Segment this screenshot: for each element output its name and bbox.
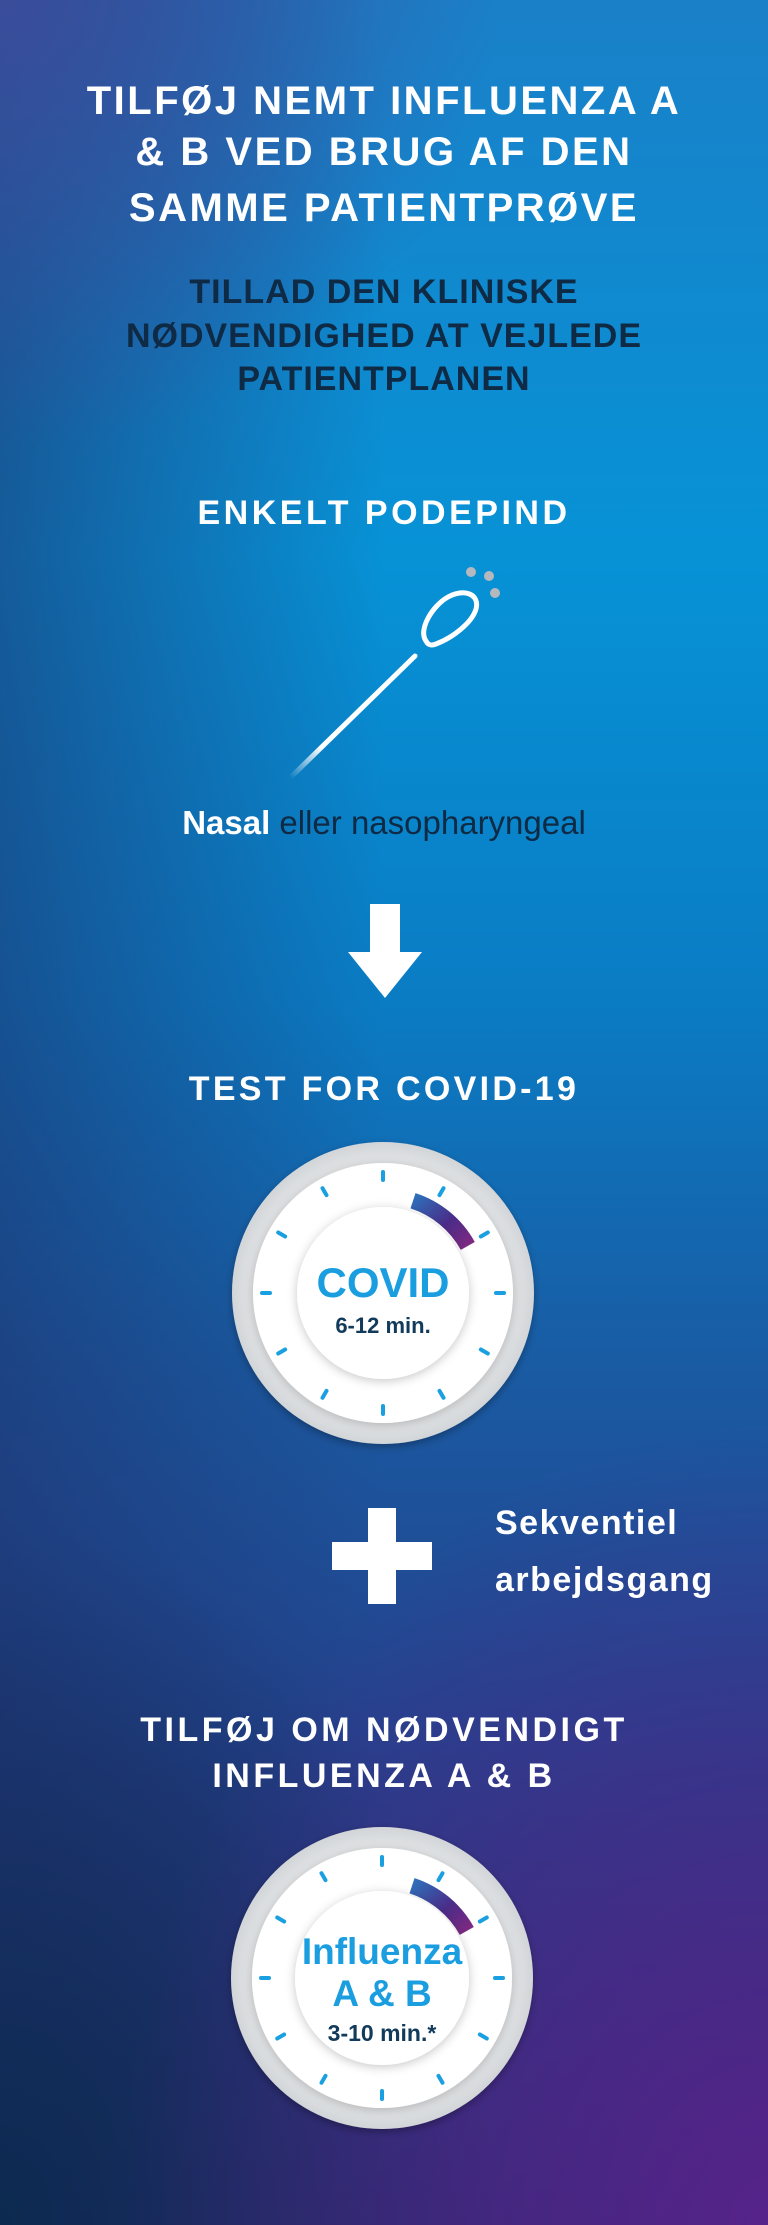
- influenza label: [302, 1931, 463, 2046]
- label: sekventiel arbejdsgang: Sekventiel: [495, 1504, 678, 1542]
- label: sekventiel arbejdsgang: [495, 1504, 714, 1599]
- label: sekventiel arbejdsgang: arbejdsgang: [495, 1561, 714, 1599]
- influenza label: Influenza: [302, 1931, 463, 1972]
- icon: plus: [332, 1508, 432, 1604]
- heading: test for covid-19: TEST FOR COVID-19: [189, 1070, 579, 1108]
- heading: tilføj om nødvendigt: INFLUENZA A & B: [212, 1757, 556, 1795]
- progress arc: [410, 1878, 474, 1935]
- subtitle: TILLAD DEN KLINISKE: [189, 273, 579, 311]
- icon: swab: [290, 567, 500, 778]
- subtitle: PATIENTPLANEN: [237, 360, 531, 398]
- subtitle: [126, 273, 642, 398]
- clock: covid: [232, 1142, 534, 1444]
- arrow down: [348, 904, 422, 998]
- swab caption: Nasal eller nasopharyngeal: [182, 804, 586, 841]
- heading: tilføj om nødvendigt: [140, 1711, 628, 1795]
- heading: enkelt podepind: ENKELT PODEPIND: [197, 494, 571, 532]
- covid label: COVID: [316, 1259, 450, 1306]
- title: TILFØJ NEMT INFLUENZA A: [87, 79, 681, 123]
- progress arc: [410, 1193, 475, 1250]
- title: SAMME PATIENTPRØVE: [129, 186, 639, 230]
- influenza label: 3-10 min.*: [328, 2020, 436, 2046]
- subtitle: NØDVENDIGHED AT VEJLEDE: [126, 317, 642, 355]
- clock: influenza: [231, 1827, 533, 2129]
- influenza label: A & B: [332, 1973, 432, 2014]
- title: & B VED BRUG AF DEN: [135, 130, 633, 174]
- title: [87, 79, 681, 230]
- heading: tilføj om nødvendigt: TILFØJ OM NØDVENDIGT: [140, 1711, 628, 1749]
- clock: covid: 6-12 min.: [335, 1313, 431, 1338]
